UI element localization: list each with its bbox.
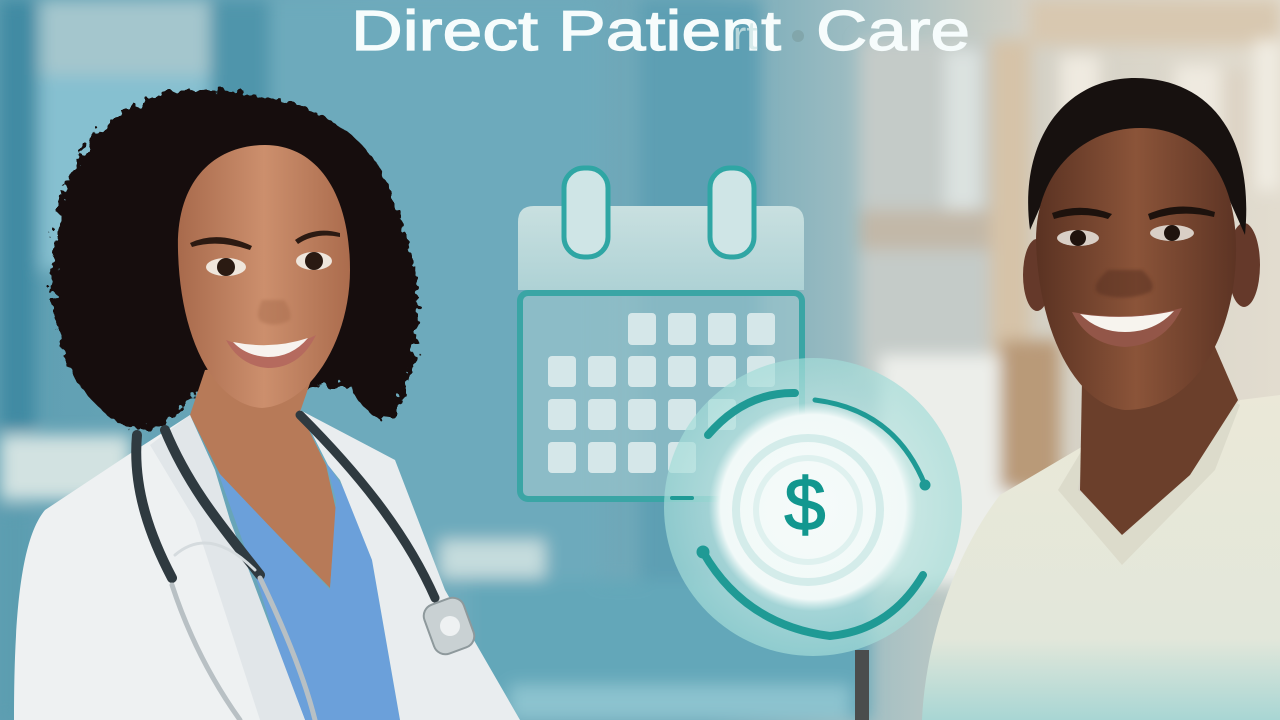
white coat right <box>300 410 520 720</box>
calendar header <box>518 206 804 290</box>
coin disc <box>664 358 962 656</box>
patient face <box>1036 128 1236 410</box>
calendar body <box>520 293 802 499</box>
dollar sign: $ <box>784 463 826 546</box>
doctor neck <box>190 360 336 588</box>
title: Direct Patient <box>351 0 781 63</box>
patient eyebrows <box>1052 206 1215 220</box>
patient hair <box>1028 78 1246 235</box>
icon: calendar <box>518 168 804 499</box>
doctor nose <box>258 300 290 325</box>
doctor hair <box>52 90 418 429</box>
blue scrubs <box>218 462 400 720</box>
patient ears <box>1023 223 1260 311</box>
calendar day cells <box>548 313 775 473</box>
patient nose <box>1096 270 1153 298</box>
doctor eyes <box>206 252 332 276</box>
patient eyes <box>1057 225 1194 246</box>
patient <box>922 78 1280 720</box>
patient smile <box>1072 308 1182 347</box>
stethoscope chest piece <box>420 594 478 658</box>
stethoscope <box>136 415 435 720</box>
doctor face <box>178 145 350 408</box>
doctor smile <box>226 335 316 368</box>
calendar rings <box>564 168 754 257</box>
coin swooshes <box>672 393 930 636</box>
title: rt <box>733 14 757 58</box>
icon: dollar coin <box>664 358 962 656</box>
white coat left <box>14 415 305 720</box>
coin inner rings <box>736 438 880 582</box>
title: Care <box>816 0 970 63</box>
doctor eyebrows <box>190 231 340 250</box>
title <box>351 0 970 63</box>
doctor <box>14 90 520 720</box>
patient neck <box>1080 340 1238 535</box>
patient shirt <box>922 395 1280 720</box>
